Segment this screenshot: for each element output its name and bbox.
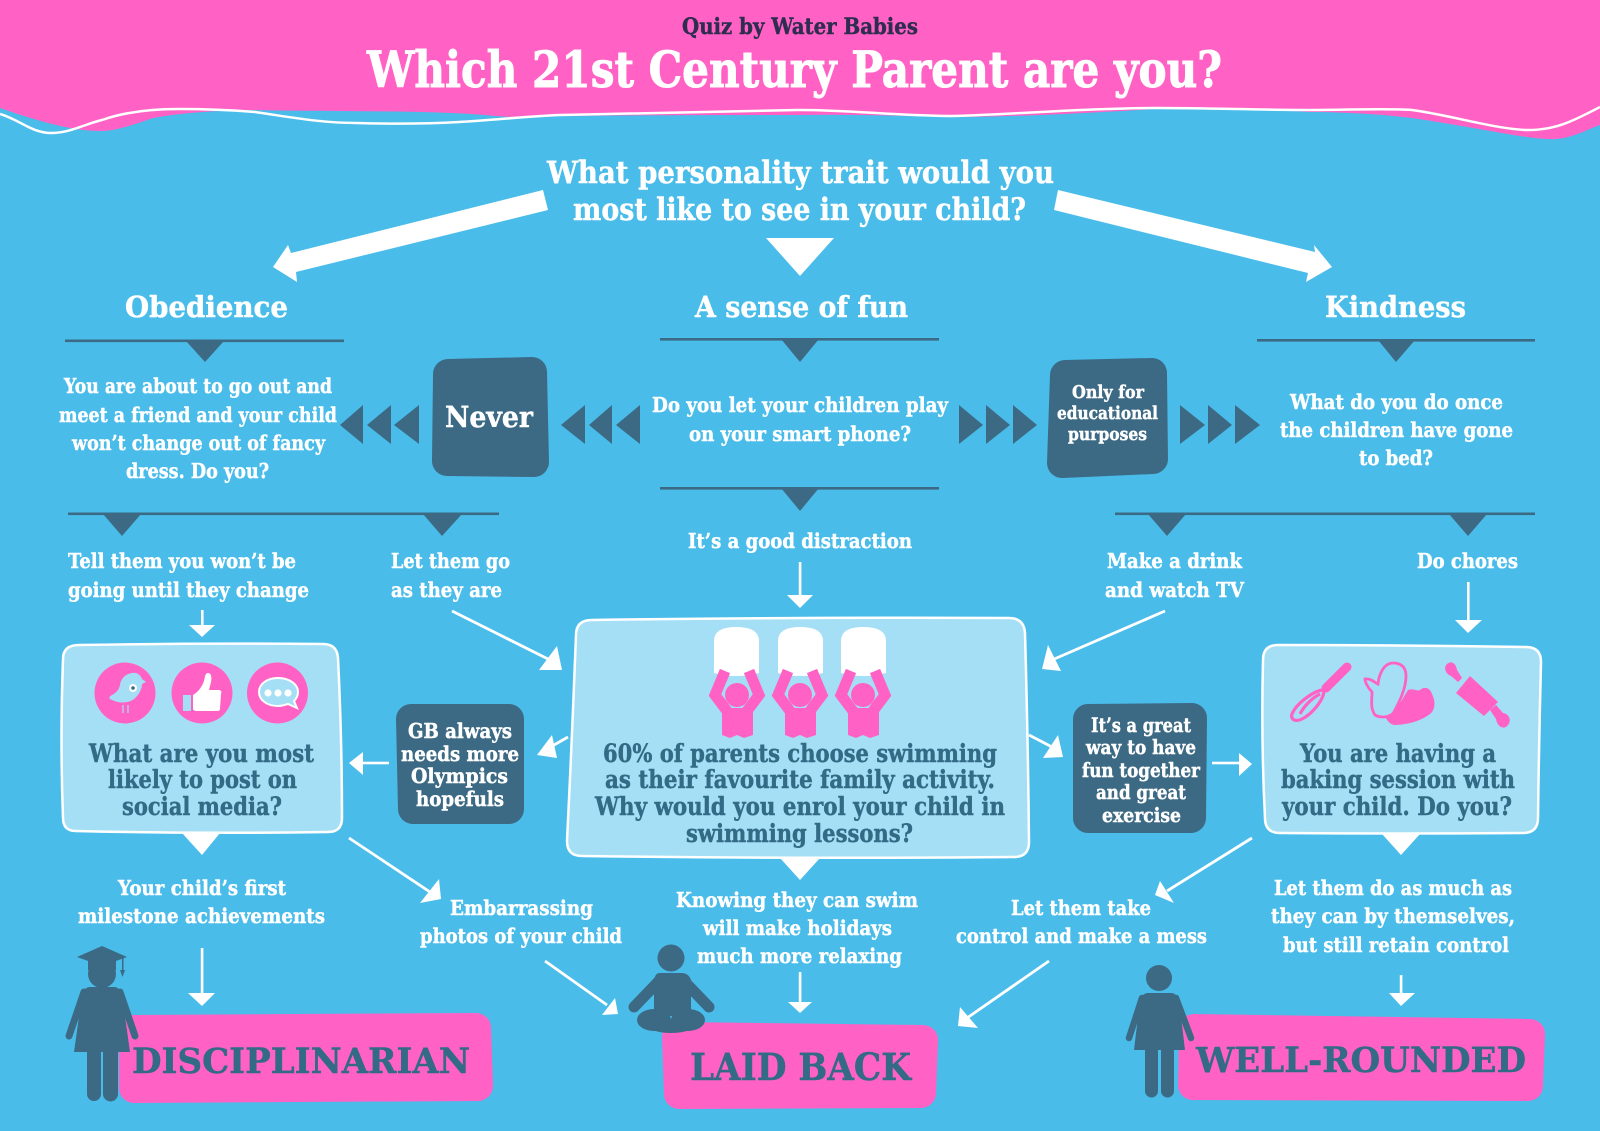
answer: first milestones: Your child’s first (117, 876, 286, 900)
question: smartphone (652, 393, 949, 446)
subtitle: Quiz by Water Babies (682, 14, 918, 40)
answer: embarrassing photos: photos of your child (420, 924, 622, 948)
icon: person (1129, 965, 1191, 1098)
arrow: great way to baking (1212, 753, 1252, 776)
arrow: to kindness (1054, 190, 1332, 282)
answer: tell them: going until they change (68, 578, 309, 602)
question: obedience: dress. Do you? (126, 459, 269, 483)
panel text: likely to post on (108, 765, 297, 794)
panel text: baking session with (1281, 765, 1515, 794)
divider: obedience (65, 340, 344, 362)
answer: let them go: Let them go (391, 549, 510, 573)
arrow: tell them down (189, 610, 215, 637)
triple arrows: towards kindness (1180, 405, 1260, 444)
result: disciplinarian: DISCIPLINARIAN (132, 1041, 470, 1082)
answer: holidays: Knowing they can swim (676, 888, 918, 912)
answer: embarrassing photos: Embarrassing (450, 896, 593, 920)
arrow: embarrassing to laid back (545, 961, 618, 1015)
icon: thumbs up (172, 662, 232, 724)
result: disciplinarian (132, 1028, 478, 1088)
box: GB always needs more: Olympics (411, 764, 508, 788)
question: smartphone: on your smart phone? (689, 422, 911, 446)
box: only for educational purposes (1057, 373, 1158, 463)
box: GB always needs more: GB always (408, 719, 512, 743)
icon: bird (94, 662, 156, 724)
answer: retain control (1271, 876, 1515, 957)
question: kindness (1280, 390, 1513, 470)
question: obedience (59, 374, 337, 483)
swimmer 2 (778, 627, 823, 738)
question: obedience: meet a friend and your child (59, 403, 337, 427)
arrow: to obedience (273, 190, 548, 282)
box: never (445, 372, 534, 462)
arrow: GB to social media (349, 752, 389, 775)
answer: tell them: Tell them you won’t be (68, 549, 296, 573)
main question: What personality trait would you (546, 155, 1054, 191)
answer: holidays: much more relaxing (697, 944, 902, 968)
panel: social media (62, 644, 342, 855)
box: great way to have fun: and great (1096, 780, 1187, 804)
result: well-rounded: WELL-ROUNDED (1195, 1040, 1526, 1081)
panel text: You are having a (1299, 739, 1496, 768)
box: GB always needs more: needs more (401, 742, 519, 766)
answer: make a drink (1105, 549, 1245, 602)
answer: good distraction: It’s a good distraction (688, 529, 912, 553)
triple arrows: towards never (561, 405, 640, 444)
arrow: retain control down (1389, 975, 1415, 1006)
answer: retain control: they can by themselves, (1271, 904, 1515, 928)
triple arrows: towards obedience (340, 405, 419, 444)
answer: first milestones (78, 876, 325, 928)
box: great way to have fun (1082, 713, 1200, 827)
question: kindness: What do you do once (1289, 390, 1503, 414)
answer: let them go: as they are (391, 578, 502, 602)
box: never: Never (445, 400, 534, 434)
heading: Obedience: Obedience (125, 290, 288, 324)
panel: swimming (567, 618, 1029, 880)
panel text (1281, 739, 1515, 821)
box: great way to have fun: It’s a great (1091, 713, 1192, 737)
heading: A sense of fun: A sense of fun (694, 290, 908, 324)
arrow: make a drink to centre (1042, 611, 1165, 671)
panel text (594, 739, 1005, 848)
box: GB always needs more: hopefuls (416, 787, 504, 811)
icon: oven mitts (1365, 663, 1434, 725)
arrow: milestones down (188, 948, 215, 1006)
pointer (780, 858, 820, 880)
answer: do chores: Do chores (1417, 549, 1518, 573)
arrow: holidays down (788, 972, 812, 1013)
arrow: centre to GB (537, 735, 568, 758)
question: kindness: to bed? (1359, 446, 1433, 470)
box: only for educational purposes: purposes (1068, 424, 1147, 445)
header banner (0, 0, 1600, 139)
arrow: centre to great way (1029, 735, 1063, 758)
panel text: your child. Do you? (1281, 792, 1512, 821)
icon: person with graduation cap (69, 946, 135, 1102)
answer: let them go (391, 549, 510, 602)
question: obedience: won’t change out of fancy (71, 431, 326, 455)
panel: baking (1262, 645, 1541, 855)
arrow: chores down (1455, 582, 1482, 633)
box: only for educational purposes: Only for (1072, 382, 1144, 403)
divider: kindness (1257, 339, 1535, 362)
title: Which 21st Century Parent are you? (366, 40, 1222, 99)
answer: retain control: but still retain control (1283, 933, 1509, 957)
box: GB always needs more (401, 719, 519, 811)
icon: swimmers (714, 627, 886, 738)
answer: embarrassing photos (420, 896, 622, 948)
answer: holidays: will make holidays (702, 916, 892, 940)
panel text (88, 739, 314, 821)
panel text: 60% of parents choose swimming (603, 739, 997, 768)
panel text: What are you most (88, 739, 314, 768)
box: only for educational purposes: educational (1057, 403, 1158, 424)
answer: make a drink: Make a drink (1107, 549, 1243, 573)
divider: right answers (1115, 512, 1535, 536)
icon: speech bubble (247, 662, 308, 724)
panel text: Why would you enrol your child in (594, 792, 1005, 821)
triple arrows: towards educational (959, 405, 1037, 444)
answer: make a mess (956, 896, 1207, 948)
answer: first milestones: milestone achievements (78, 904, 325, 928)
box: great way to have fun: exercise (1102, 803, 1181, 827)
heading: Kindness: Kindness (1325, 290, 1466, 324)
question: obedience: You are about to go out and (63, 374, 332, 398)
box: great way to have fun: fun together (1082, 758, 1200, 782)
answer: holidays (676, 888, 918, 968)
box: great way to have fun: way to have (1085, 735, 1196, 759)
icon: meditating person (634, 944, 709, 1033)
arrow: let them go to centre (452, 611, 562, 670)
icon: whisk (1292, 667, 1347, 720)
panel text: swimming lessons? (686, 819, 913, 848)
swimmer 1 (714, 627, 759, 738)
arrow: mess to laid back (958, 961, 1049, 1028)
pointer (182, 833, 220, 855)
answer: make a mess: control and make a mess (956, 924, 1207, 948)
answer: make a drink: and watch TV (1105, 578, 1245, 602)
panel text: as their favourite family activity. (605, 765, 995, 794)
divider: left answers (68, 512, 499, 536)
divider: a sense of fun (660, 338, 939, 362)
question: smartphone: Do you let your children play (652, 393, 949, 417)
divider: centre answer (660, 487, 939, 511)
arrow: distraction down (787, 562, 813, 608)
panel text: social media? (122, 792, 282, 821)
question: kindness: the children have gone (1280, 418, 1513, 442)
main question: most like to see in your child? (573, 192, 1026, 228)
pointer (1382, 834, 1420, 855)
swimmer 3 (841, 627, 886, 738)
main question (546, 155, 1054, 228)
answer: retain control: Let them do as much as (1274, 876, 1512, 900)
answer: tell them (68, 549, 309, 602)
icon: rolling pin (1445, 662, 1510, 728)
arrow: to a sense of fun (766, 238, 834, 276)
arrow: social media to embarrassing (349, 838, 441, 903)
answer: make a mess: Let them take (1011, 896, 1151, 920)
arrow: baking to make a mess (1155, 838, 1252, 903)
result: laid back: LAID BACK (690, 1045, 913, 1089)
